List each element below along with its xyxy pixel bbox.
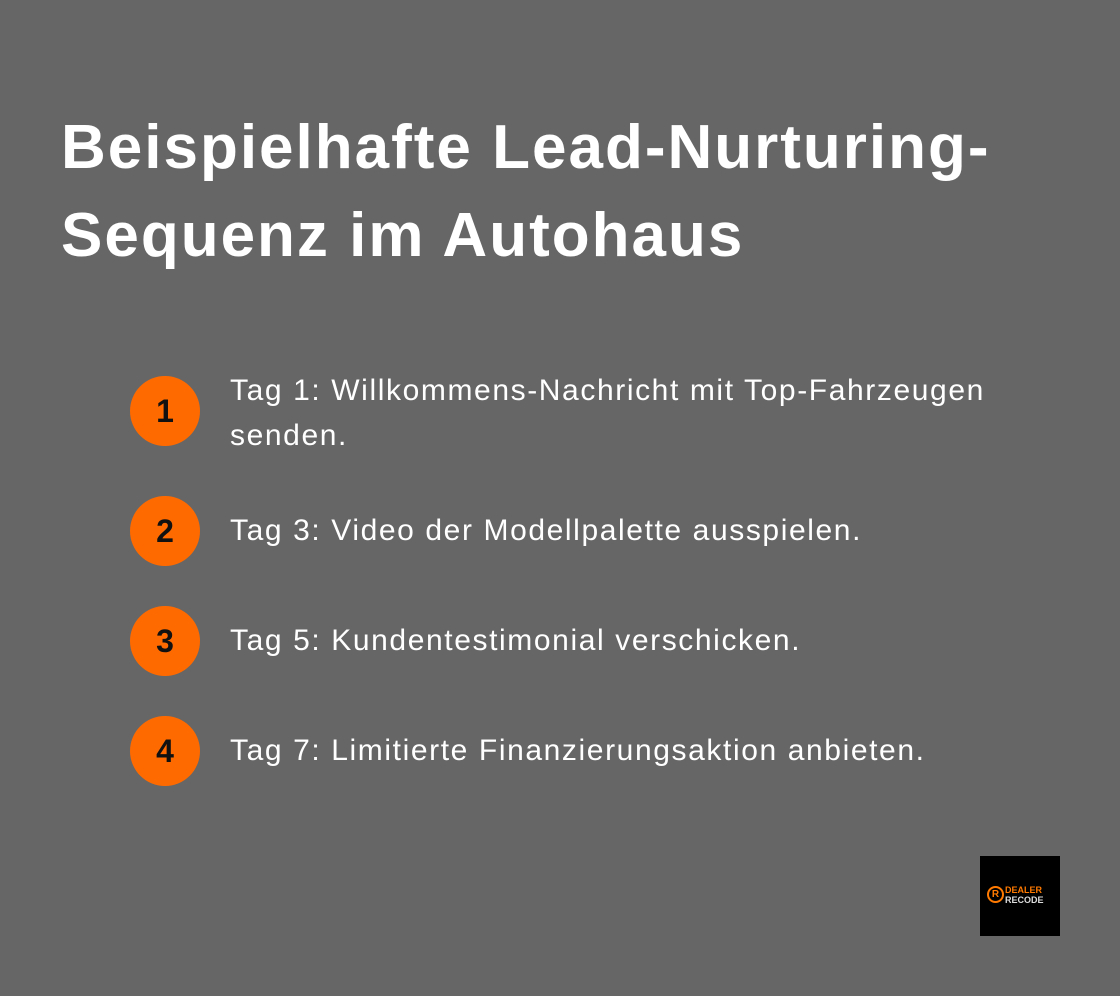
step 1 [130,374,985,452]
logo [980,856,1060,936]
text: Tag 3: Video der Modellpalette ausspielen. [230,514,862,547]
text: 1 [156,393,174,429]
text: 3 [156,623,174,659]
title: Sequenz im Autohaus [61,201,744,270]
text: 4 [156,733,174,769]
title [61,113,991,270]
text: Tag 5: Kundentestimonial verschicken. [230,624,801,657]
title: Beispielhafte Lead-Nurturing- [61,113,991,182]
logo: RECODE [1005,895,1044,905]
step 3 [130,606,801,676]
text: Tag 7: Limitierte Finanzierungsaktion anbieten. [230,734,926,767]
text: senden. [230,419,348,452]
step 2 [130,496,862,566]
logo: DEALER [1005,885,1042,895]
logo: R [992,889,999,900]
step 4 [130,716,926,786]
text: 2 [156,513,174,549]
text: Tag 1: Willkommens-Nachricht mit Top-Fahrzeugen [230,374,985,407]
